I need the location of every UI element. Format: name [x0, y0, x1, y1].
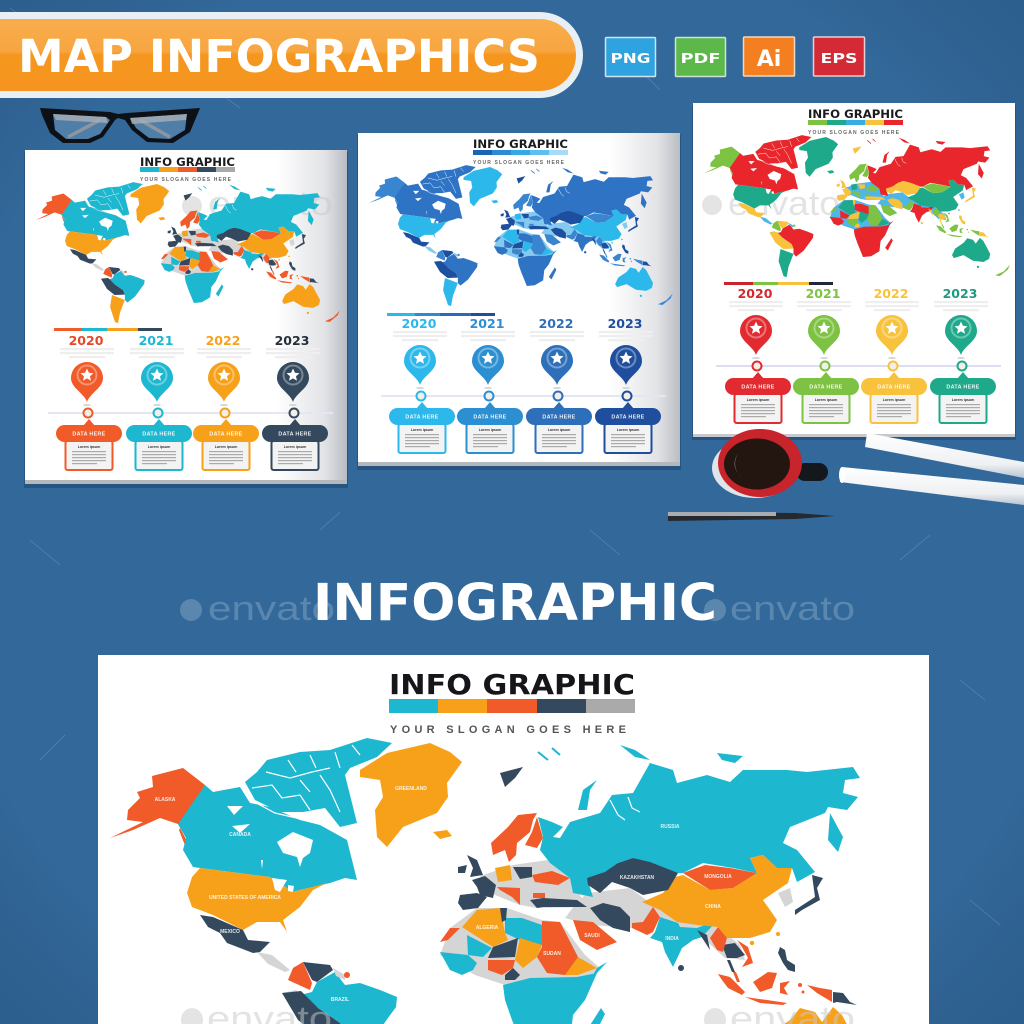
icon: Ai: Ai	[757, 47, 781, 72]
item 2020: 2020	[738, 286, 773, 301]
item 2022: DATA HERE	[877, 384, 911, 390]
map labels: CHINA	[705, 904, 721, 910]
item 2020	[725, 286, 791, 423]
item 2020: DATA HERE	[405, 414, 439, 420]
item 2022: DATA HERE	[542, 414, 576, 420]
card: blue map	[357, 133, 681, 470]
color bar	[389, 699, 635, 713]
item 2023: Lorem ipsum	[284, 445, 306, 449]
watermark: envato	[208, 185, 333, 223]
watermarks	[181, 1000, 855, 1024]
item 2022	[526, 316, 592, 453]
item 2021: Lorem ipsum	[815, 398, 837, 402]
map labels: KAZAKHSTAN	[620, 875, 655, 881]
item 2020	[56, 333, 122, 470]
map labels: UNITED STATES OF AMERICA	[209, 895, 281, 901]
map labels: RUSSIA	[661, 824, 680, 830]
item 2021: 2021	[139, 333, 173, 348]
icon: EPS: EPS	[820, 51, 858, 67]
icon: EPS	[814, 37, 864, 76]
item 2022: Lorem ipsum	[215, 445, 237, 449]
progress bar	[54, 328, 162, 331]
item 2023: Lorem ipsum	[952, 398, 974, 402]
watermarks: envato	[208, 590, 335, 628]
item 2021	[126, 333, 192, 470]
card title: INFO GRAPHIC	[808, 107, 903, 121]
banner title: MAP INFOGRAPHICS	[18, 30, 540, 83]
item 2022	[861, 286, 927, 423]
map labels: GREENLAND	[395, 786, 427, 792]
world map	[36, 182, 340, 323]
item 2020: 2020	[69, 333, 104, 348]
card title: INFO GRAPHIC	[473, 137, 568, 151]
item 2023	[595, 316, 661, 453]
slogan: YOUR SLOGAN GOES HERE	[390, 724, 626, 736]
item 2021: Lorem ipsum	[148, 445, 170, 449]
progress bar	[724, 282, 833, 285]
card: orange and cyan map	[24, 150, 348, 488]
map labels: INDIA	[665, 936, 679, 942]
item 2022	[193, 333, 259, 470]
large map panel	[98, 655, 929, 1024]
item 2020: Lorem ipsum	[747, 398, 769, 402]
item 2020	[389, 316, 455, 453]
header banner	[0, 12, 583, 98]
item 2023: Lorem ipsum	[617, 428, 639, 432]
item 2023: 2023	[608, 316, 642, 331]
item 2023: 2023	[943, 286, 977, 301]
item 2021	[793, 286, 859, 423]
item 2020: DATA HERE	[741, 384, 775, 390]
icon: Ai	[744, 37, 794, 76]
watermarks	[180, 590, 855, 628]
glasses	[40, 108, 200, 143]
progress bar	[387, 313, 495, 316]
item 2022: 2022	[206, 333, 240, 348]
slogan: YOUR SLOGAN GOES HERE	[140, 177, 232, 183]
panel title: INFO GRAPHIC	[389, 669, 635, 701]
icon: PDF	[676, 38, 726, 76]
item 2023	[262, 333, 328, 470]
item 2020: 2020	[402, 316, 437, 331]
map labels: ALGERIA	[476, 925, 499, 931]
item 2020: Lorem ipsum	[411, 428, 433, 432]
item 2021: DATA HERE	[142, 432, 176, 438]
map labels	[155, 786, 732, 1003]
map labels: MEXICO	[220, 929, 240, 935]
slogan: YOUR SLOGAN GOES HERE	[473, 160, 565, 166]
item 2023	[930, 286, 996, 423]
watermarks: envato	[730, 590, 855, 628]
item 2022: Lorem ipsum	[883, 398, 905, 402]
map labels: BRAZIL	[331, 997, 349, 1003]
card: red and green map	[692, 103, 1016, 440]
item 2022: Lorem ipsum	[548, 428, 570, 432]
item 2021	[457, 316, 523, 453]
world map	[704, 135, 1010, 277]
color bar	[140, 167, 235, 172]
item 2020: Lorem ipsum	[78, 445, 100, 449]
item 2022: 2022	[539, 316, 573, 331]
card title: INFO GRAPHIC	[140, 155, 235, 169]
item 2021: 2021	[806, 286, 840, 301]
world map	[110, 738, 912, 1024]
paper rolls	[839, 433, 1024, 505]
item 2021: Lorem ipsum	[479, 428, 501, 432]
item 2020: DATA HERE	[72, 432, 106, 438]
item 2023: DATA HERE	[278, 432, 312, 438]
world map	[369, 165, 673, 306]
section heading: INFOGRAPHIC	[313, 574, 717, 633]
pen	[668, 512, 835, 521]
map labels: MONGOLIA	[704, 874, 732, 880]
item 2023: DATA HERE	[946, 384, 980, 390]
map labels: SAUDI	[584, 933, 600, 939]
watermark	[182, 185, 333, 223]
icon: PNG	[606, 38, 656, 76]
item 2022: 2022	[874, 286, 908, 301]
icon: PNG: PNG	[610, 51, 650, 67]
slogan: YOUR SLOGAN GOES HERE	[808, 130, 900, 136]
watermark: envato	[728, 185, 840, 223]
item 2023: 2023	[275, 333, 309, 348]
item 2022: DATA HERE	[209, 432, 243, 438]
color bar	[473, 150, 568, 155]
format icons	[606, 37, 864, 76]
map labels: CANADA	[229, 832, 251, 838]
map labels: ALASKA	[155, 797, 176, 803]
icon: PDF: PDF	[680, 51, 720, 67]
item 2021: DATA HERE	[809, 384, 843, 390]
coffee cup	[712, 429, 828, 498]
item 2021: DATA HERE	[473, 414, 507, 420]
item 2023: DATA HERE	[611, 414, 645, 420]
color bar	[808, 120, 903, 125]
map labels: SUDAN	[543, 951, 561, 957]
item 2021: 2021	[470, 316, 504, 331]
